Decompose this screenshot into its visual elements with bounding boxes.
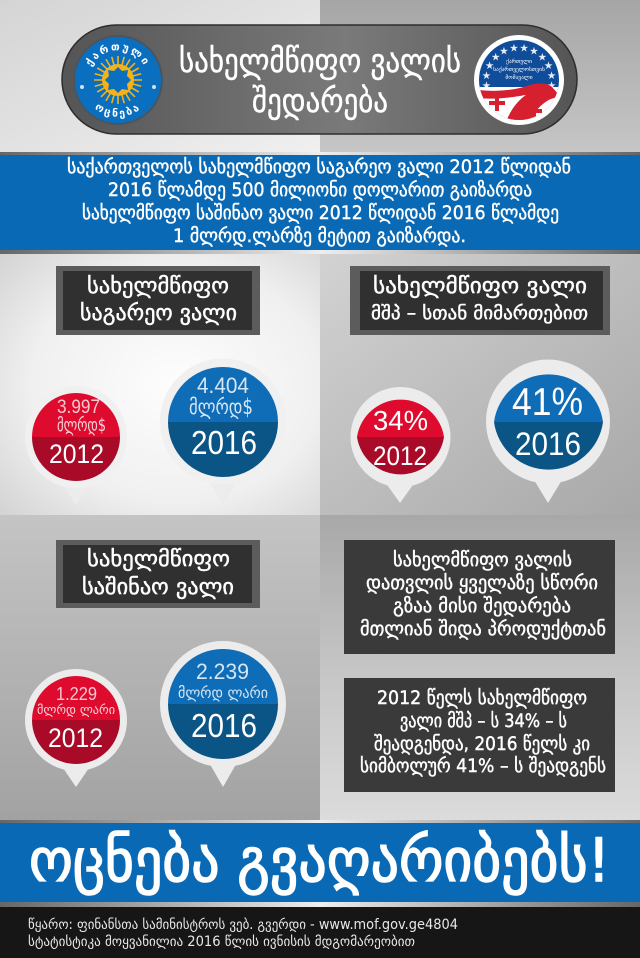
text panel: how to measure debt: გზაა მისი შედარება xyxy=(393,595,571,617)
pin: GDP ratio 2012: 2012 xyxy=(373,441,427,471)
pin: domestic debt 2016: 2.239 xyxy=(196,659,249,684)
pin: domestic debt 2016: 2016 xyxy=(191,707,257,744)
icon: coalition logo: მომავალი xyxy=(505,74,533,81)
icon: Georgian Dream logo: ქართული xyxy=(86,44,148,67)
pin: external debt 2012 xyxy=(25,386,127,505)
slogan banner: ოცნება გვაღარიბებს! xyxy=(29,826,610,896)
pin: external debt 2016 xyxy=(160,358,286,505)
icon: coalition logo: ★ xyxy=(482,70,491,82)
pin: external debt 2012: 2012 xyxy=(49,439,104,469)
pin: domestic debt 2012: 2012 xyxy=(48,723,103,753)
icon: coalition logo: ★ xyxy=(499,46,509,58)
pin: domestic debt 2012 xyxy=(25,669,127,787)
icon: coalition logo: ★ xyxy=(509,42,519,54)
heading: external debt: სახელმწიფო xyxy=(87,274,229,299)
text panel: debt figures: შეადგენდა, 2016 წელს კი xyxy=(374,733,590,755)
pin: external debt 2016: მლრდ$ xyxy=(189,395,253,419)
pin: external debt 2016: 2016 xyxy=(191,424,257,461)
heading: debt to GDP xyxy=(350,266,610,335)
pin: GDP ratio 2012: 34% xyxy=(373,405,428,436)
icon: coalition logo: ★ xyxy=(491,52,500,64)
pin: external debt 2012: მლრდ$ xyxy=(57,415,106,436)
title banner xyxy=(61,24,578,135)
text panel: how to measure debt: დათვლის ყველაზე სწორი xyxy=(366,572,598,594)
icon: coalition logo: ★ xyxy=(544,60,553,72)
pin: GDP ratio 2016 xyxy=(486,360,610,503)
title text: შედარება xyxy=(252,81,388,120)
pin: GDP ratio 2016: 41% xyxy=(512,381,583,424)
icon: coalition logo: ★ xyxy=(519,42,529,54)
pin: GDP ratio 2012 xyxy=(350,387,450,503)
icon: coalition logo: ★ xyxy=(547,70,556,82)
icon: coalition logo: ★ xyxy=(529,46,539,58)
intro panel xyxy=(0,152,640,254)
footer source note: სტატისტიკა მოყვანილია 2016 წლის ივნისის მდგომარეობით xyxy=(28,933,415,950)
icon: coalition logo: ★ xyxy=(547,80,556,92)
pin: external debt 2012: 3.997 xyxy=(57,397,100,418)
title text: სახელმწიფო ვალის xyxy=(179,41,461,80)
pin: external debt 2016: 4.404 xyxy=(197,373,249,398)
text panel: how to measure debt: სახელმწიფო ვალის xyxy=(393,549,572,571)
footer source note xyxy=(0,907,640,958)
pin: domestic debt 2012: მლრდ ლარი xyxy=(37,703,115,718)
text panel: how to measure debt xyxy=(344,540,615,654)
footer source note: წყარო: ფინანსთა სამინისტროს ვებ. გვერდი - www.mof.gov.ge4804 xyxy=(28,916,458,933)
intro panel: 1 მლრდ.ლარზე მეტით გაიზარდა. xyxy=(173,225,466,247)
text panel: debt figures xyxy=(344,678,615,792)
heading: domestic debt: საშინაო ვალი xyxy=(82,575,234,600)
intro panel: სახელმწიფო საშინაო ვალი 2012 წლიდან 2016 წლამდე xyxy=(82,202,559,224)
text panel: how to measure debt: მთლიან შიდა პროდუქტთან xyxy=(360,618,606,640)
pin: GDP ratio 2016: 2016 xyxy=(515,426,581,462)
heading: debt to GDP: სახელმწიფო ვალი xyxy=(373,274,587,299)
icon: coalition logo: საქართველოსთვის xyxy=(493,66,545,73)
heading: domestic debt xyxy=(56,540,260,608)
icon: Georgian Dream logo xyxy=(73,35,163,125)
pin: domestic debt 2016 xyxy=(160,641,286,787)
icon: Georgian Dream logo: ოცნება xyxy=(96,104,139,119)
intro panel: საქართველოს სახელმწიფო საგარეო ვალი 2012 წლიდან xyxy=(67,156,571,178)
pin: domestic debt 2012: 1.229 xyxy=(56,684,97,704)
heading: external debt xyxy=(56,266,260,335)
text panel: debt figures: სიმბოლურ 41% – ს შეადგენს xyxy=(360,755,606,777)
heading: domestic debt: სახელმწიფო xyxy=(87,547,230,572)
icon: coalition logo: ქართული xyxy=(506,58,532,65)
text panel: debt figures: ვალი მშპ – ს 34% – ს xyxy=(400,710,567,732)
icon: coalition logo: ★ xyxy=(482,80,491,92)
pin: domestic debt 2016: მლრდ ლარი xyxy=(178,684,268,702)
icon: coalition logo: ★ xyxy=(485,60,494,72)
title text xyxy=(179,41,461,120)
icon: coalition logo: ★ xyxy=(538,52,547,64)
heading: external debt: საგარეო ვალი xyxy=(80,301,237,326)
text panel: debt figures: 2012 წელს სახელმწიფო xyxy=(377,687,587,709)
icon: coalition logo xyxy=(474,35,565,125)
intro panel: 2016 წლამდე 500 მილიონი დოლარით გაიზარდა xyxy=(108,179,532,201)
heading: debt to GDP: მშპ – სთან მიმართებით xyxy=(371,303,588,324)
